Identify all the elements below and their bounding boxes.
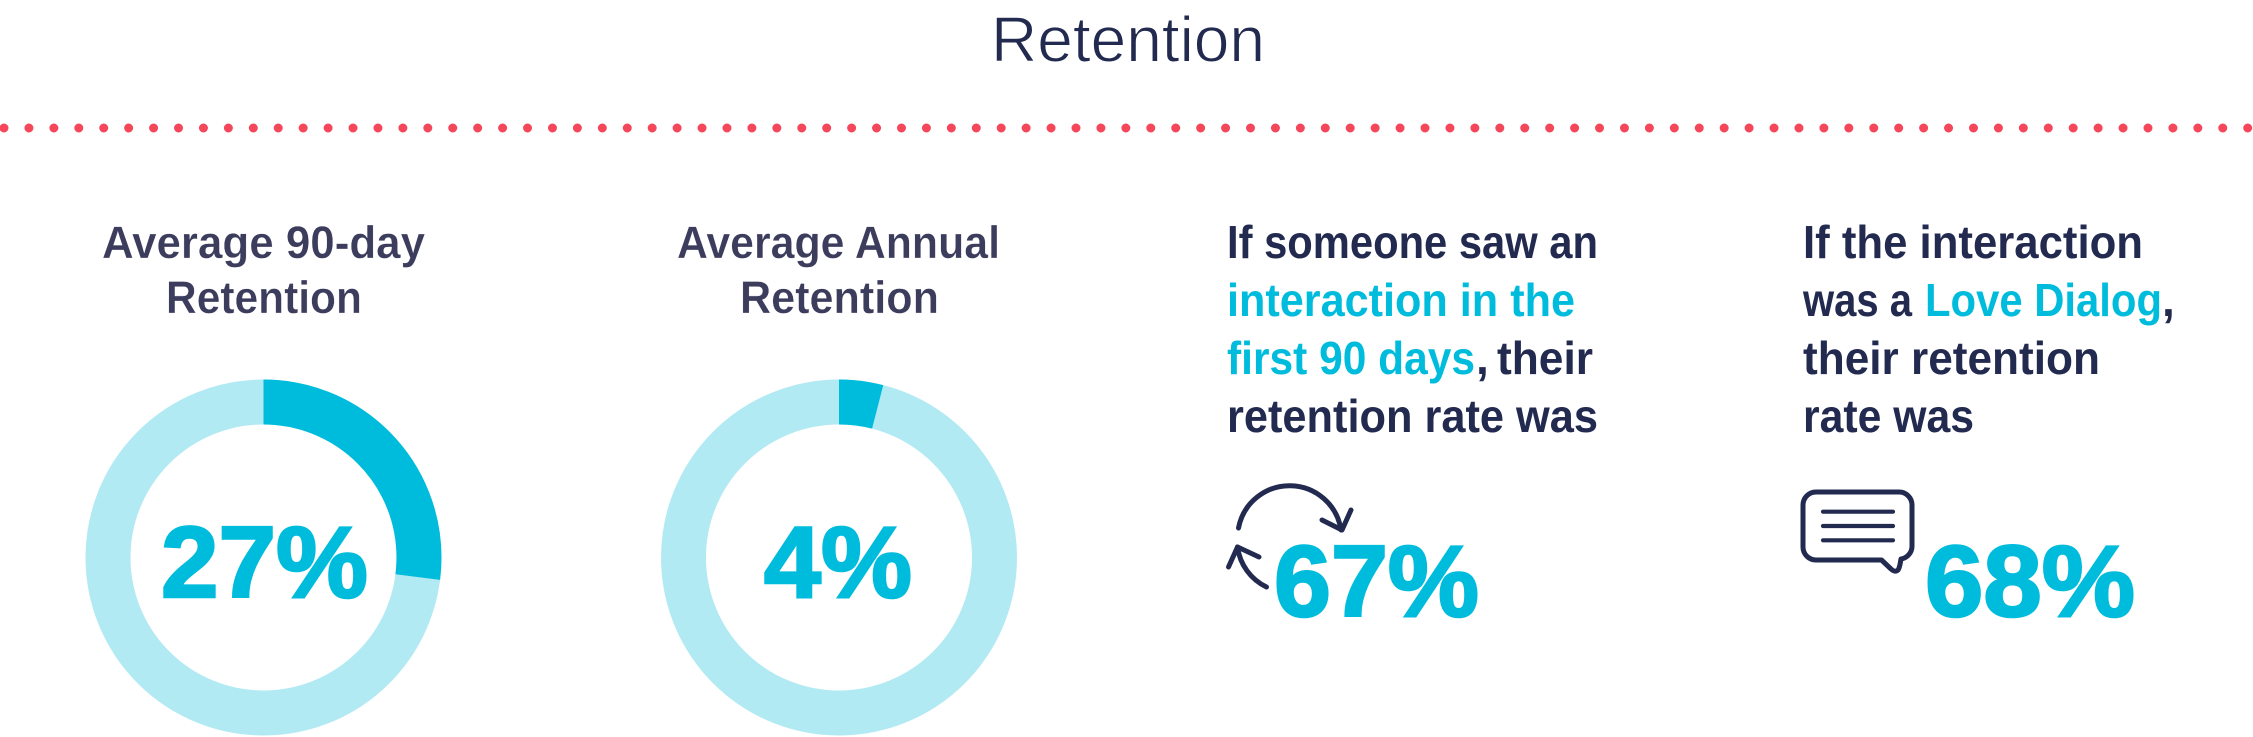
text block: love dialog statement: their retention xyxy=(1803,332,2100,384)
text block: first 90 days statement: retention rate was xyxy=(1227,390,1598,442)
heading: average 90-day retention xyxy=(102,217,425,323)
value: 67%: 67% xyxy=(1274,526,1479,638)
dotted divider xyxy=(4,124,2253,132)
text block: love dialog statement: rate was xyxy=(1803,390,1974,442)
value: 27%: 27% xyxy=(161,507,368,619)
text block: first 90 days statement xyxy=(1227,216,1598,442)
donut chart: 4% xyxy=(684,402,994,713)
text block: first 90 days statement: their xyxy=(1497,332,1593,384)
text block: love dialog statement xyxy=(1802,216,2175,442)
text block: love dialog statement: was a xyxy=(1802,274,1912,326)
heading: average annual retention: Retention xyxy=(740,272,939,323)
text block: first 90 days statement: first 90 days xyxy=(1227,332,1475,384)
text block: love dialog statement: , xyxy=(2162,274,2175,326)
panel: average 90-day retention xyxy=(102,217,425,713)
icon: cycle arrows xyxy=(1228,486,1351,587)
panel: average annual retention xyxy=(677,217,1000,713)
text block: first 90 days statement: , xyxy=(1476,332,1489,384)
heading: average annual retention: Average Annual xyxy=(677,217,1000,268)
donut chart: 27% xyxy=(108,402,419,713)
heading: average 90-day retention: Retention xyxy=(166,272,362,323)
text block: love dialog statement: Love Dialog xyxy=(1925,274,2162,326)
value: 68%: 68% xyxy=(1925,526,2135,638)
value: 4%: 4% xyxy=(764,507,912,619)
panel: interaction in first 90 days xyxy=(1227,216,1598,638)
heading: average annual retention xyxy=(677,217,1000,323)
icon: speech bubble xyxy=(1803,492,1912,571)
panel: love dialog xyxy=(1802,216,2175,638)
heading: average 90-day retention: Average 90-day xyxy=(102,217,425,268)
title: Retention xyxy=(991,4,1265,76)
text block: first 90 days statement: If someone saw an xyxy=(1227,216,1598,268)
text block: first 90 days statement: interaction in the xyxy=(1227,274,1575,326)
text block: love dialog statement: If the interaction xyxy=(1803,216,2143,268)
